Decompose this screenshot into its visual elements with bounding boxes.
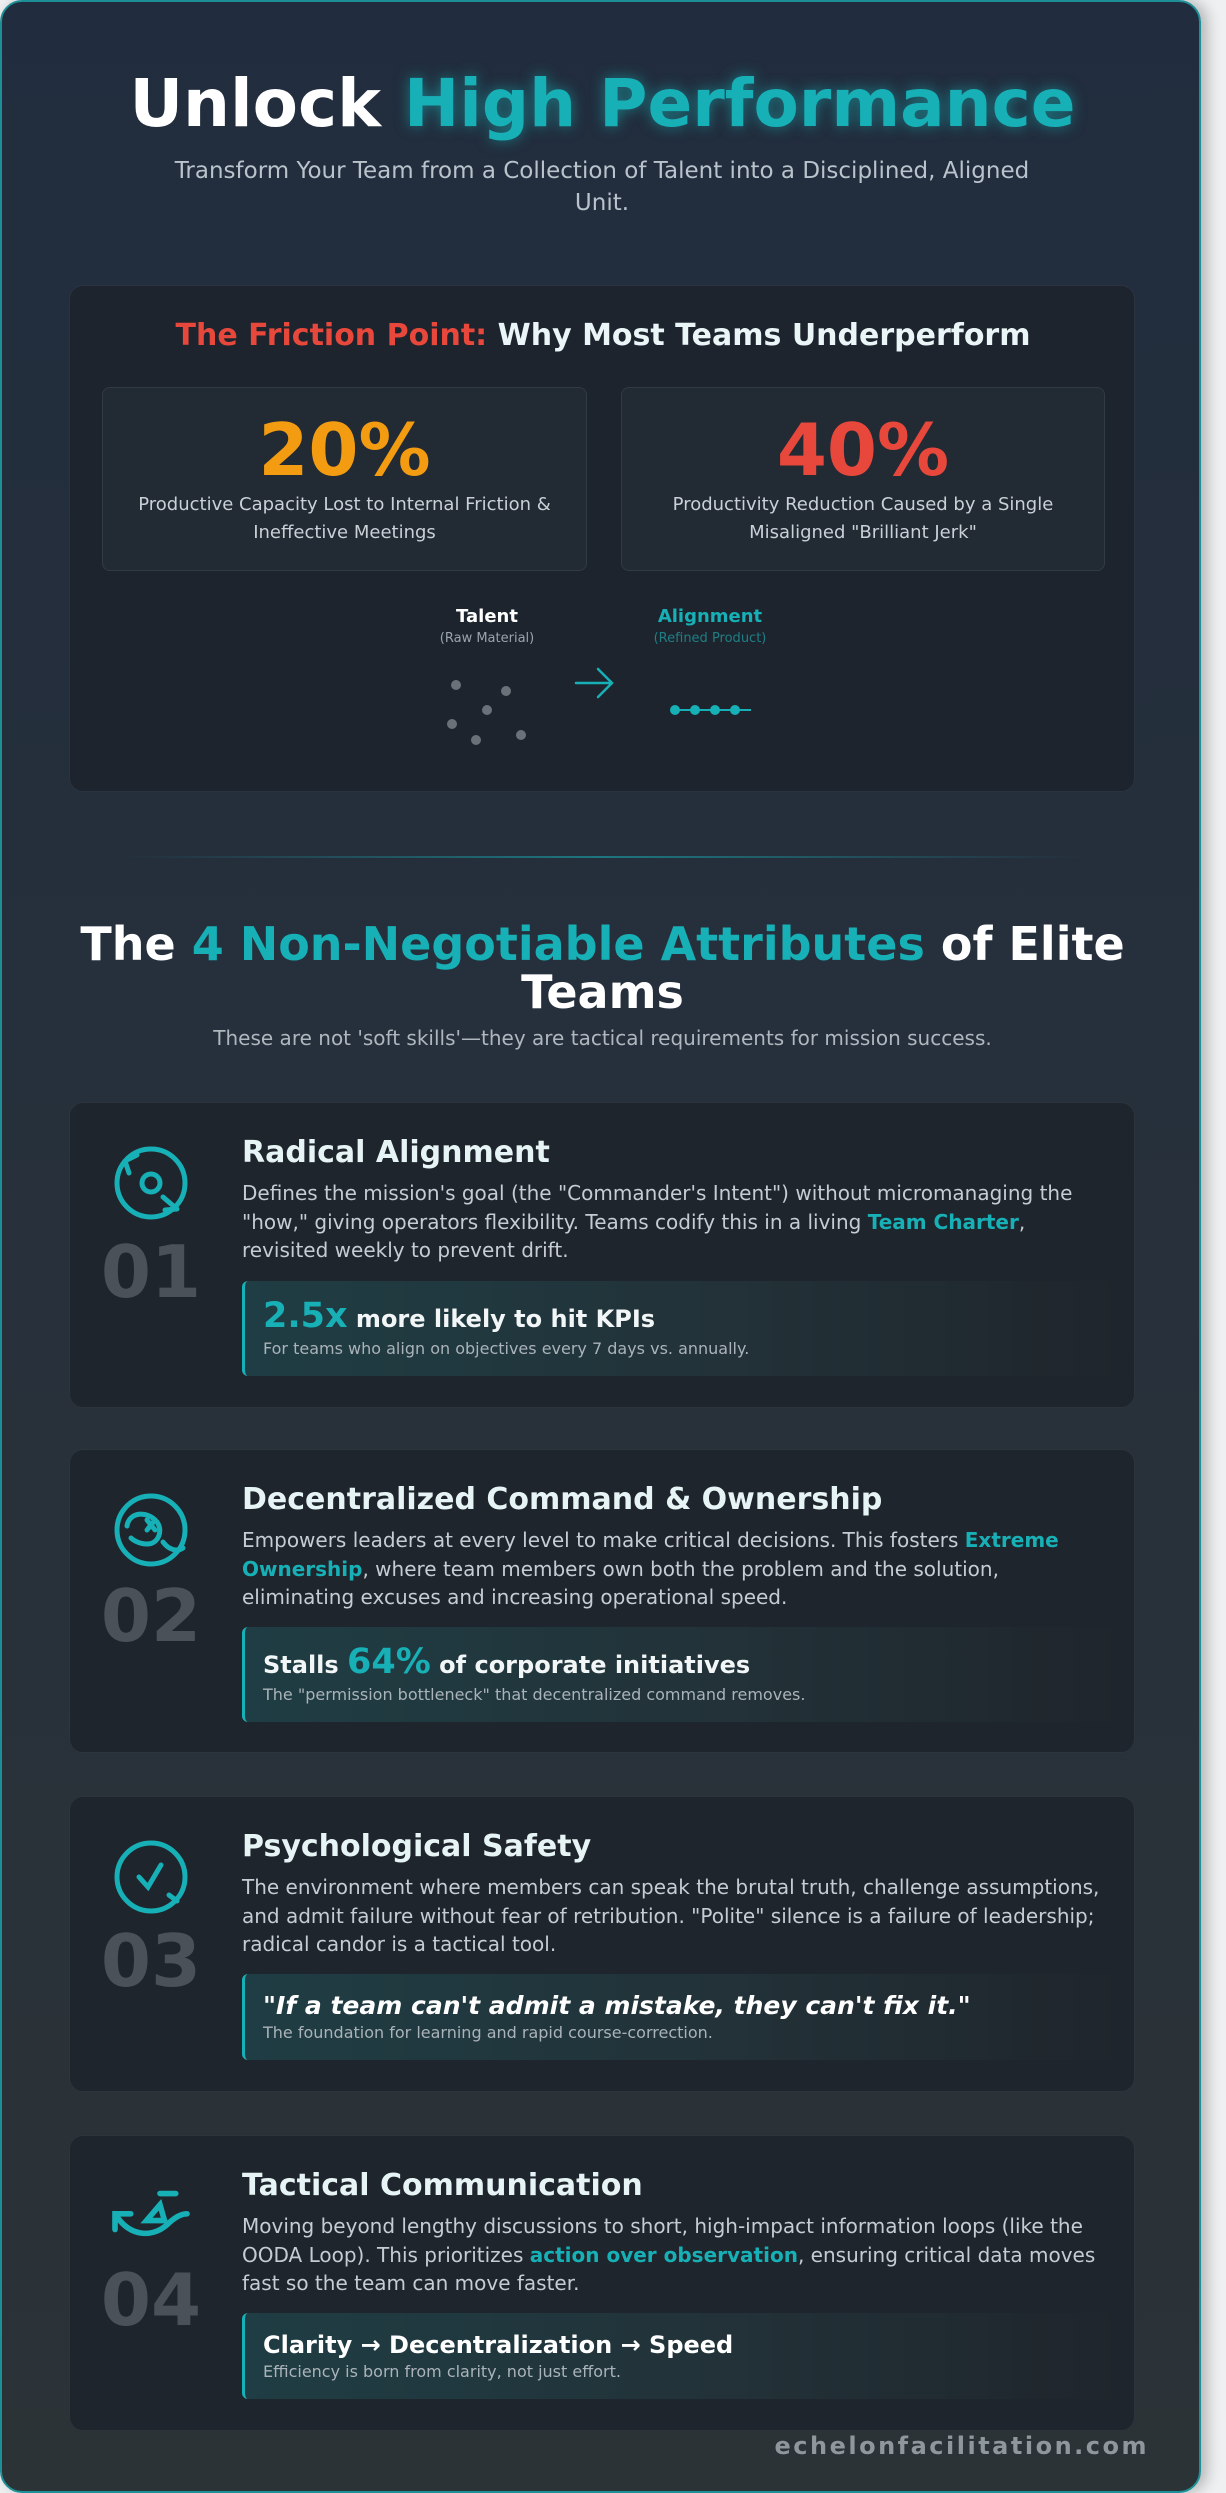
number 04: 04: [101, 2258, 201, 2342]
card 1: radical alignment: [69, 1102, 1135, 1408]
talent label: Talent: [456, 606, 518, 627]
talent label: [440, 606, 534, 646]
callout: For teams who align on objectives every 7 days vs. annually.: [263, 1339, 749, 1358]
card 2: decentralized command: Decentralized Command & Ownership: [242, 1482, 882, 1517]
callout: Efficiency is born from clarity, not just effort.: [263, 2362, 621, 2381]
card 3: psychological safety: The environment where members can speak the brutal truth, challenge assumptions, and admit failure without fear of retribution. "Polite" silence is a failure of leadership; radical candor is a tactical tool.: [242, 1875, 1099, 1956]
stat: 40%: Productivity Reduction Caused by a Single Misaligned "Brilliant Jerk": [673, 494, 1053, 543]
card 4: tactical communication: Tactical Communication: [242, 2168, 643, 2203]
icon: check circle: [114, 1840, 188, 1914]
callout: [242, 1627, 1122, 1722]
callout: The "permission bottleneck" that decentralized command removes.: [263, 1685, 805, 1704]
callout: [242, 2313, 1122, 2399]
card 4: tactical communication: [69, 2135, 1135, 2431]
footer url: echelonfacilitation.com: [774, 2432, 1149, 2460]
panel heading: The Friction Point: Why Most Teams Underperform: [176, 318, 1030, 353]
stat: 20%: Productive Capacity Lost to Internal Friction & Ineffective Meetings: [138, 494, 551, 543]
stat: 40%: [621, 387, 1105, 571]
callout: quote: [242, 1974, 1122, 2060]
alignment label: (Refined Product): [654, 631, 766, 646]
section heading: The 4 Non-Negotiable Attributes of Elite Teams: [80, 917, 1125, 1019]
callout: [242, 1281, 1122, 1376]
talent label: (Raw Material): [440, 631, 534, 646]
stat: 20%: 20%: [258, 408, 431, 492]
alignment label: Alignment: [658, 606, 762, 627]
card 3: psychological safety: [69, 1796, 1135, 2092]
card 3: psychological safety: Psychological Safety: [242, 1829, 591, 1864]
icon: ownership: [114, 1494, 188, 1566]
callout: Stalls 64% of corporate initiatives: [263, 1642, 750, 1682]
icon: alignment cycle: [114, 1146, 188, 1220]
stat: 40%: 40%: [777, 408, 949, 492]
callout: 2.5x more likely to hit KPIs: [263, 1296, 655, 1336]
panel: friction point: [69, 285, 1135, 792]
callout: Clarity → Decentralization → Speed: [263, 2331, 733, 2359]
diagram: dots and arrow: [447, 668, 751, 745]
card 2: decentralized command: Empowers leaders at every level to make critical decisions. This fosters Extreme Ownership, where team members own both the problem and the solution, eliminating excuses and increasing operational speed.: [242, 1528, 1059, 1609]
title: Unlock High Performance: [129, 65, 1076, 142]
callout: quote: "If a team can't admit a mistake, they can't fix it.": [263, 1991, 971, 2020]
section subtitle: These are not 'soft skills'—they are tactical requirements for mission success.: [213, 1026, 992, 1050]
alignment label: [654, 606, 766, 646]
stat: 20%: [102, 387, 587, 571]
callout: quote: The foundation for learning and rapid course-correction.: [263, 2023, 713, 2042]
subtitle: Transform Your Team from a Collection of Talent into a Disciplined, Aligned Unit.: [175, 158, 1029, 216]
number 03: 03: [101, 1919, 201, 2003]
number 02: 02: [101, 1574, 201, 1658]
card 4: tactical communication: Moving beyond lengthy discussions to short, high-impact information loops (like the OODA Loop). This prioritizes action over observation, ensuring critical data moves fast so the team can move faster.: [242, 2214, 1095, 2295]
card 1: radical alignment: Radical Alignment: [242, 1135, 550, 1170]
icon: communication loop: [112, 2190, 190, 2236]
card 1: radical alignment: Defines the mission's goal (the "Commander's Intent") without micromanaging the "how," giving operators flexibility. Teams codify this in a living Team Charter, revisited weekly to prevent drift.: [242, 1181, 1072, 1262]
number 01: 01: [101, 1230, 201, 1314]
card 2: decentralized command: [69, 1449, 1135, 1753]
